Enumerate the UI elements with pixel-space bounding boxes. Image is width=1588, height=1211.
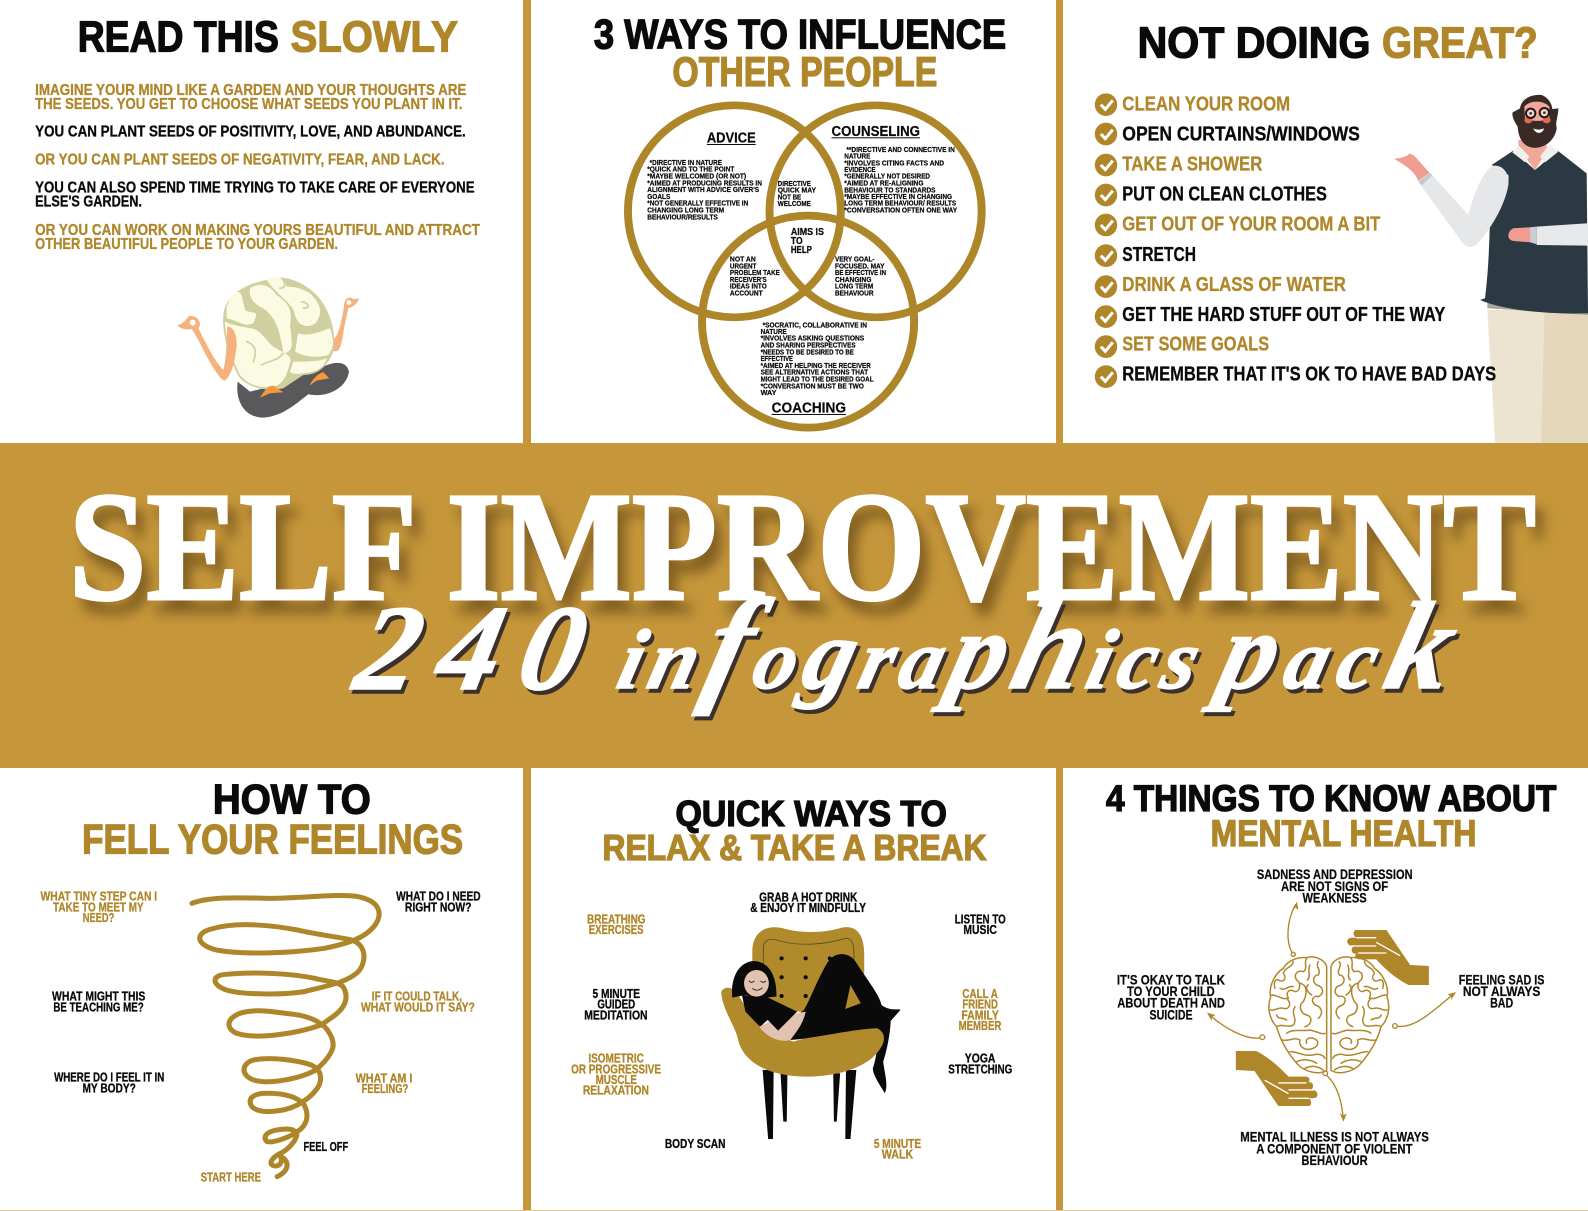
counseling text: *AIMED AT RE-ALIGNING	[844, 178, 923, 187]
spiral labels: WHAT MIGHT THIS	[52, 989, 146, 1004]
heading	[602, 794, 987, 868]
banner subtitle: 240	[343, 580, 598, 716]
panel: three ways to influence	[594, 11, 1006, 428]
armchair labels: STRETCHING	[948, 1062, 1012, 1076]
callouts: SADNESS AND DEPRESSION	[1257, 867, 1413, 882]
callouts: ABOUT DEATH AND	[1117, 996, 1225, 1011]
counseling and coaching overlap text: CHANGING	[835, 275, 871, 284]
armchair labels: RELAXATION	[583, 1083, 649, 1098]
counseling text: **DIRECTIVE AND CONNECTIVE IN	[846, 145, 955, 154]
checklist: DRINK A GLASS OF WATER	[1122, 274, 1346, 296]
advice and coaching overlap text: NOT AN	[730, 255, 756, 264]
spiral labels: WHAT WOULD IT SAY?	[361, 999, 475, 1014]
armchair labels: FAMILY	[961, 1008, 999, 1022]
counseling and coaching overlap text: BE EFFECTIVE IN	[835, 268, 886, 277]
text block: OTHER BEAUTIFUL PEOPLE TO YOUR GARDEN.	[35, 236, 338, 253]
heading: SLOWLY	[291, 14, 458, 62]
advice and counseling overlap text: WELCOME	[778, 199, 811, 208]
heading: FELL YOUR FEELINGS	[82, 816, 463, 862]
armchair labels: & ENJOY IT MINDFULLY	[750, 900, 866, 915]
counseling and coaching overlap text: VERY GOAL-	[835, 255, 875, 264]
heading: OTHER PEOPLE	[672, 49, 937, 95]
illustration: woman resting in armchair	[721, 927, 900, 1139]
spiral labels: FEEL OFF	[304, 1139, 348, 1154]
spiral labels: IF IT COULD TALK,	[372, 989, 462, 1004]
spiral labels: FEELING?	[362, 1081, 408, 1096]
icon: brain	[1269, 957, 1389, 1073]
counseling text: BEHAVIOUR TO STANDARDS	[844, 185, 936, 194]
advice text: GOALS	[647, 192, 670, 201]
icon: meditating brain	[177, 277, 359, 418]
checklist: STRETCH	[1122, 244, 1196, 266]
armchair labels: MEMBER	[959, 1018, 1002, 1033]
text block: THE SEEDS. YOU GET TO CHOOSE WHAT SEEDS YOU PLANT IN IT.	[35, 96, 462, 113]
checklist: GET OUT OF YOUR ROOM A BIT	[1122, 214, 1381, 236]
advice and coaching overlap text	[730, 255, 780, 298]
armchair labels: OR PROGRESSIVE	[571, 1062, 661, 1076]
venn diagram	[628, 105, 982, 428]
advice and coaching overlap text: ACCOUNT	[730, 289, 763, 298]
coaching text: SEE ALTERNATIVE ACTIONS THAT	[761, 368, 868, 377]
advice text: BEHAVIOUR/RESULTS	[647, 212, 718, 221]
text block	[35, 82, 480, 253]
panel: read this slowly	[35, 14, 480, 418]
coaching text: *NEEDS TO BE DESIRED TO BE	[761, 347, 854, 356]
callouts: TO YOUR CHILD	[1127, 984, 1215, 999]
coaching text: *AIMED AT HELPING THE RECEIVER	[761, 361, 871, 370]
counseling text: *MAYBE EFFECTIVE IN CHANGING	[844, 192, 952, 201]
armchair labels: MEDITATION	[584, 1008, 648, 1022]
coaching text: *CONVERSATION MUST BE TWO	[761, 381, 864, 390]
spiral	[192, 896, 379, 1177]
venn circle titles	[707, 124, 920, 417]
armchair labels: YOGA	[965, 1051, 995, 1066]
coaching text: NATURE	[761, 327, 787, 336]
spiral labels: BE TEACHING ME?	[53, 999, 144, 1014]
counseling text: *GENERALLY NOT DESIRED	[844, 172, 930, 181]
counseling and coaching overlap text	[835, 255, 886, 298]
banner subtitle	[343, 572, 1471, 717]
armchair labels: MUSCLE	[596, 1072, 637, 1087]
advice and coaching overlap text: RECEIVER'S	[730, 275, 767, 284]
advice text	[647, 158, 762, 221]
advice and counseling overlap text	[778, 179, 817, 208]
venn circle titles: COUNSELING	[832, 124, 920, 140]
advice text: ALIGNMENT WITH ADVICE GIVER'S	[647, 185, 759, 194]
heading: NOT DOING	[1138, 19, 1370, 67]
text block: YOU CAN ALSO SPEND TIME TRYING TO TAKE CARE OF EVERYONE	[35, 180, 475, 197]
coaching text	[761, 320, 874, 397]
centre text: TO	[791, 236, 803, 247]
callouts: A COMPONENT OF VIOLENT	[1256, 1141, 1413, 1156]
advice and coaching overlap text: PROBLEM TAKE	[730, 268, 780, 277]
heading: MENTAL HEALTH	[1211, 812, 1476, 854]
callouts: SUICIDE	[1149, 1007, 1193, 1022]
text block: OR YOU CAN PLANT SEEDS OF NEGATIVITY, FEAR, AND LACK.	[35, 152, 444, 169]
callouts: BEHAVIOUR	[1301, 1153, 1368, 1168]
text block: OR YOU CAN WORK ON MAKING YOURS BEAUTIFUL AND ATTRACT	[35, 222, 480, 239]
armchair labels: WALK	[882, 1147, 914, 1162]
heading	[1138, 19, 1538, 67]
text block: YOU CAN PLANT SEEDS OF POSITIVITY, LOVE, AND ABUNDANCE.	[35, 124, 466, 141]
counseling text: *CONVERSATION OFTEN ONE WAY	[844, 206, 958, 215]
armchair labels	[571, 890, 1012, 1162]
venn circle titles: ADVICE	[707, 131, 756, 147]
callouts: MENTAL ILLNESS IS NOT ALWAYS	[1240, 1130, 1429, 1145]
advice and counseling overlap text: NOT BE	[778, 192, 801, 201]
callouts	[1117, 867, 1544, 1168]
callouts: IT'S OKAY TO TALK	[1117, 972, 1225, 987]
coaching text: EFFECTIVE	[761, 354, 793, 363]
advice text: *NOT GENERALLY EFFECTIVE IN	[647, 199, 748, 208]
panel: how to feel your feelings	[41, 776, 481, 1185]
banner subtitle: infographics	[607, 572, 1220, 717]
coaching text: WAY	[761, 388, 777, 397]
armchair labels: GRAB A HOT DRINK	[759, 890, 858, 904]
armchair labels: 5 MINUTE	[874, 1136, 921, 1151]
heading: READ THIS	[78, 14, 279, 62]
counseling and coaching overlap text: BEHAVIOUR	[835, 289, 874, 298]
heading	[594, 11, 1006, 95]
icon: caring hands	[1236, 930, 1429, 1106]
arrows	[1207, 902, 1456, 1122]
spiral labels: MY BODY?	[82, 1080, 136, 1095]
centre text	[791, 227, 824, 256]
heading: 3 WAYS TO INFLUENCE	[594, 11, 1006, 57]
heading: GREAT?	[1382, 19, 1538, 67]
armchair labels: BODY SCAN	[665, 1136, 725, 1151]
armchair labels: EXERCISES	[589, 922, 644, 937]
checklist: PUT ON CLEAN CLOTHES	[1122, 184, 1327, 206]
checklist: REMEMBER THAT IT'S OK TO HAVE BAD DAYS	[1122, 364, 1496, 386]
panel: four things about mental health	[1106, 777, 1557, 1168]
callouts: NOT ALWAYS	[1463, 984, 1540, 999]
callouts: WEAKNESS	[1302, 890, 1367, 905]
callouts: FEELING SAD IS	[1459, 972, 1544, 987]
armchair labels: LISTEN TO	[955, 912, 1006, 926]
advice text: *MAYBE WELCOMED (OR NOT)	[647, 172, 746, 181]
heading	[1106, 777, 1557, 854]
spiral labels: START HERE	[201, 1170, 261, 1185]
spiral labels: NEED?	[83, 910, 114, 925]
spiral labels	[41, 889, 481, 1185]
centre text: HELP	[791, 245, 812, 256]
spiral labels: WHAT AM I	[356, 1070, 412, 1085]
checklist: CLEAN YOUR ROOM	[1122, 94, 1290, 116]
spiral labels: TAKE TO MEET MY	[53, 899, 144, 914]
counseling and coaching overlap text: FOCUSED. MAY	[835, 261, 885, 270]
advice and coaching overlap text: IDEAS INTO	[730, 282, 767, 291]
text block: ELSE'S GARDEN.	[35, 194, 142, 211]
armchair labels: 5 MINUTE	[593, 986, 640, 1001]
armchair labels: BREATHING	[587, 912, 646, 926]
advice text: *QUICK AND TO THE POINT	[647, 165, 735, 174]
advice and counseling overlap text: QUICK MAY	[778, 186, 817, 195]
checklist: TAKE A SHOWER	[1122, 154, 1263, 176]
coaching text: *SOCRATIC, COLLABORATIVE IN	[763, 320, 867, 329]
counseling text: EVIDENCE	[844, 165, 876, 174]
advice and coaching overlap text: URGENT	[730, 261, 757, 270]
panel: not doing great	[1095, 19, 1588, 443]
callouts: ARE NOT SIGNS OF	[1281, 879, 1388, 894]
centre text: AIMS IS	[791, 227, 824, 238]
advice text: *AIMED AT PRODUCING RESULTS IN	[647, 178, 762, 187]
callouts: BAD	[1490, 996, 1513, 1011]
checklist	[1095, 93, 1496, 388]
advice text: CHANGING LONG TERM	[647, 206, 724, 215]
counseling text: LONG TERM BEHAVIOUR/ RESULTS	[844, 199, 956, 208]
armchair labels: ISOMETRIC	[588, 1051, 644, 1066]
armchair labels: FRIEND	[962, 997, 998, 1012]
counseling text: *INVOLVES CITING FACTS AND	[844, 158, 944, 167]
checklist: SET SOME GOALS	[1122, 334, 1269, 356]
spiral labels: WHAT TINY STEP CAN I	[41, 889, 157, 904]
checklist: OPEN CURTAINS/WINDOWS	[1122, 124, 1360, 146]
armchair labels: GUIDED	[597, 997, 635, 1012]
counseling text	[844, 145, 958, 215]
venn circle titles: COACHING	[772, 401, 846, 417]
heading: RELAX & TAKE A BREAK	[602, 828, 987, 868]
coaching text: MIGHT LEAD TO THE DESIRED GOAL	[761, 374, 874, 383]
heading: QUICK WAYS TO	[676, 794, 947, 834]
heading: HOW TO	[213, 776, 371, 822]
advice and counseling overlap text: DIRECTIVE	[778, 179, 811, 188]
heading	[78, 14, 458, 62]
illustration: presenting man	[1394, 95, 1588, 443]
spiral labels: RIGHT NOW?	[405, 899, 472, 914]
spiral labels: WHERE DO I FEEL IT IN	[54, 1070, 164, 1085]
text block: IMAGINE YOUR MIND LIKE A GARDEN AND YOUR THOUGHTS ARE	[35, 82, 466, 99]
heading	[82, 776, 463, 862]
coaching text: AND SHARING PERSPECTIVES	[761, 341, 856, 350]
armchair labels: CALL A	[962, 986, 998, 1001]
counseling and coaching overlap text: LONG TERM	[835, 282, 873, 291]
checklist: GET THE HARD STUFF OUT OF THE WAY	[1122, 304, 1446, 326]
panel: quick ways to relax	[571, 794, 1012, 1162]
armchair labels: MUSIC	[963, 922, 997, 937]
counseling text: NATURE	[844, 151, 870, 160]
spiral labels: WHAT DO I NEED	[396, 889, 481, 904]
banner	[0, 443, 1588, 768]
advice text: *DIRECTIVE IN NATURE	[650, 158, 722, 167]
coaching text: *INVOLVES ASKING QUESTIONS	[761, 334, 864, 343]
banner subtitle: pack	[1200, 578, 1471, 716]
